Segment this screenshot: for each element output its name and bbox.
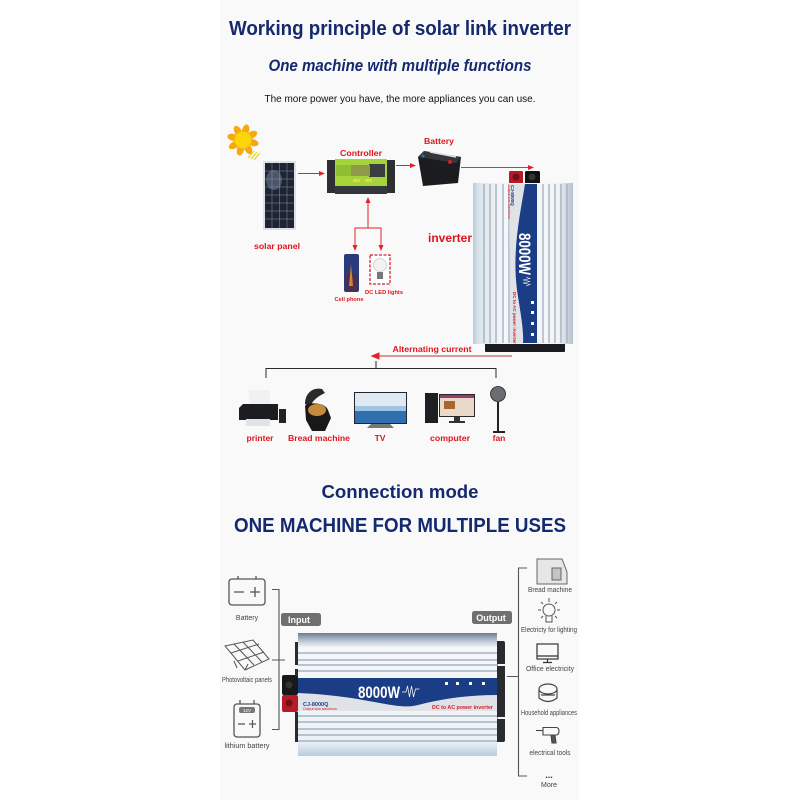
icon: battery [418,151,461,186]
label: controller: Controller [340,148,383,158]
mounting bracket [497,641,505,742]
icon: cell phone [344,254,359,292]
label: TV: TV [375,433,386,443]
icon: battery outline [229,576,265,605]
icon: photovoltaic panels [225,640,269,670]
arrow: panel to controller [298,172,324,174]
icon: bread machine [305,389,331,431]
arrow: battery to inverter [461,166,533,168]
horizontal inverter: Output sine waveform [303,707,337,711]
heading: one machine for multiple uses: ONE MACHINE FOR MULTIPLE USES [234,515,566,537]
label: DC LED lights: DC LED lights [365,290,403,296]
label: bread machine: Bread machine [288,433,350,443]
output bracket [507,568,527,776]
wattage text: 8000W [515,233,534,276]
label: photovoltaic panels: Photovoltaic panels [222,677,272,684]
model text: CJ-8000Q [303,702,329,708]
diagram: working principle [227,124,573,443]
label: cell phone: Cell phone [334,297,364,303]
title: Working principle of solar link inverter [229,18,571,40]
icon: fan [490,386,506,433]
icon: light bulb [538,598,560,622]
icon: printer [239,390,286,426]
input bracket [272,590,285,730]
icon: solar panel [263,161,296,230]
tree connector [266,361,496,378]
label: alternating current: Alternating current [392,344,472,354]
label: fan: fan [493,433,505,443]
label: electrical tools: electrical tools [530,750,571,757]
arrow: controller to battery [396,164,415,166]
label: bread machine: Bread machine [528,587,572,594]
label: household appliances: Household appliances [521,710,577,717]
icon: DC LED light [370,255,390,284]
icon: monitor [537,644,558,662]
label: output [472,611,512,624]
label: battery: Battery [424,136,454,146]
vertical inverter: DC to AC power inverter [512,292,517,344]
label: printer: printer [246,433,274,443]
icon: TV [354,392,407,428]
label: computer: computer [430,433,471,443]
arrow: alternating current [372,355,512,357]
icon: sun [227,124,260,160]
label: battery: Battery [236,615,259,622]
horizontal inverter [282,633,505,756]
icon: computer [425,393,475,423]
subtitle: One machine with multiple functions [268,56,532,75]
model text: CJ-8000Q [510,185,515,206]
background panel [220,0,579,800]
icon: lithium battery: 12V [243,708,251,713]
label: office electricity: Office electricity [526,666,574,673]
label: more: More [541,782,557,789]
vertical inverter [473,171,573,352]
label: solar panel: solar panel [254,241,300,251]
label: electricity for lighting: Electricty for lighting [521,627,577,634]
heading: connection mode: Connection mode [322,482,478,502]
label: input: Input [288,615,310,625]
tagline: The more power you have, the more appliances you can use. [264,93,536,105]
icon: lithium battery [234,700,260,737]
icon: electric drill [536,728,559,743]
label: input [281,613,321,626]
icon: controller [327,159,395,194]
arrows: controller to DC loads [355,198,381,250]
icon: rice cooker [539,684,557,702]
icon: more dots: ... [545,770,553,780]
terminals [509,171,540,184]
horizontal inverter: DC to AC power inverter [432,705,493,711]
vertical inverter: Output sine waveform [507,185,511,219]
label: lithium battery: lithium battery [224,743,270,750]
terminals [282,675,298,712]
label: inverter: inverter [428,231,472,245]
feet [485,343,565,352]
icon: bread machine outline [537,559,567,584]
wattage text: 8000W [358,683,401,702]
diagram: connection mode [222,559,577,789]
label: output: Output [476,613,506,623]
